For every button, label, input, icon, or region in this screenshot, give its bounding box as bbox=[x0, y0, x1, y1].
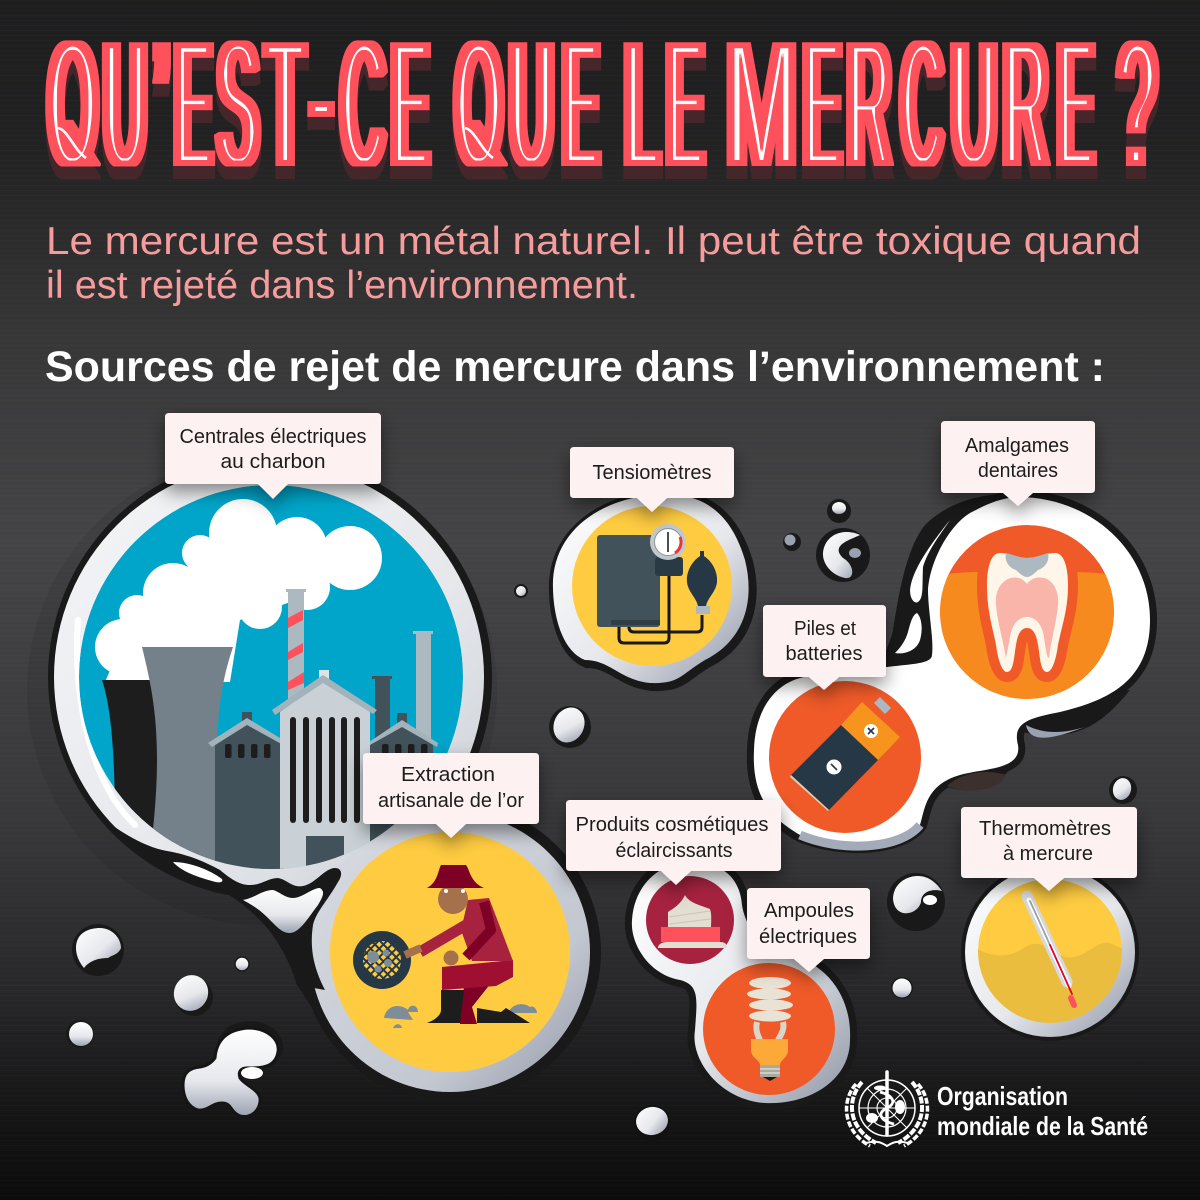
cuff bbox=[597, 535, 660, 627]
title: E bbox=[564, 5, 597, 203]
blob dark base bbox=[754, 494, 1150, 846]
label: thermometers: à mercure bbox=[1003, 843, 1093, 865]
title: L bbox=[626, 5, 658, 203]
intro text: Le mercure est un métal naturel. Il peut être toxique quand bbox=[46, 220, 1141, 263]
title: T bbox=[267, 5, 304, 203]
section heading: Sources de rejet de mercure dans l’environnement : bbox=[45, 343, 1105, 391]
title: E bbox=[668, 5, 702, 203]
title: M bbox=[727, 5, 796, 203]
label: coal power plants: Centrales électriques bbox=[180, 426, 366, 448]
title bbox=[45, 40, 1160, 180]
emblem bbox=[847, 1072, 927, 1146]
dark band between blobs bbox=[112, 825, 341, 990]
pale chimney bbox=[413, 631, 433, 744]
black cooling tower bbox=[102, 680, 174, 842]
white streak bbox=[173, 862, 222, 882]
grey cooling tower bbox=[142, 647, 233, 875]
label: artisanal gold mining: artisanale de l’or bbox=[378, 790, 524, 812]
light bulb bbox=[703, 963, 835, 1095]
title: S bbox=[218, 5, 257, 203]
title: E bbox=[176, 5, 210, 203]
title: C bbox=[342, 5, 384, 203]
miner bbox=[405, 865, 530, 1024]
intro text bbox=[46, 220, 1141, 307]
title: L bbox=[626, 5, 658, 203]
title: ’ bbox=[156, 5, 167, 203]
label: thermometers: Thermomètres bbox=[979, 818, 1111, 840]
title: C bbox=[902, 5, 941, 203]
label: batteries: batteries bbox=[786, 643, 862, 665]
blob highlights bbox=[895, 520, 950, 653]
title: T bbox=[267, 5, 304, 203]
label: skin lightening products: éclaircissants bbox=[616, 840, 732, 862]
title: R bbox=[848, 5, 890, 203]
title: E bbox=[176, 5, 210, 203]
label: dental amalgams bbox=[941, 421, 1095, 506]
title: Q bbox=[49, 5, 96, 203]
label: artisanal gold mining: Extraction bbox=[401, 764, 495, 786]
title: E bbox=[393, 5, 427, 203]
title: R bbox=[1004, 5, 1047, 203]
title: E bbox=[1059, 5, 1092, 203]
droplets bbox=[66, 499, 1137, 1141]
intro text: il est rejeté dans l’environnement. bbox=[46, 264, 638, 307]
label: dental amalgams: dentaires bbox=[978, 460, 1058, 482]
blob body bbox=[27, 455, 601, 1102]
smoke cloud bbox=[95, 499, 382, 682]
label: batteries: Piles et bbox=[794, 618, 856, 640]
gauge bbox=[650, 524, 686, 576]
label: skin lightening products bbox=[566, 800, 781, 885]
label: blood pressure monitors: Tensiomètres bbox=[592, 462, 712, 484]
organisation name: mondiale de la Santé bbox=[937, 1111, 1148, 1141]
panel: coal power plant and gold mining blob bbox=[27, 455, 601, 1102]
tubes bbox=[619, 576, 702, 643]
title: U bbox=[510, 5, 553, 203]
title: U bbox=[104, 5, 146, 203]
title: R bbox=[1004, 5, 1047, 203]
panel: sphygmomanometer blob bbox=[553, 494, 751, 685]
battery illustration bbox=[769, 681, 921, 833]
left building bbox=[208, 712, 285, 880]
thermometer bbox=[1027, 896, 1074, 1005]
title: - bbox=[312, 0, 330, 194]
label: coal power plants bbox=[165, 413, 381, 499]
title: E bbox=[1059, 5, 1092, 203]
title: U bbox=[510, 5, 553, 203]
organisation name bbox=[937, 1081, 1148, 1141]
label: coal power plants: au charbon bbox=[220, 451, 326, 473]
title: M bbox=[727, 5, 796, 203]
title: C bbox=[902, 5, 941, 203]
label: light bulbs: électriques bbox=[759, 926, 857, 948]
panel: thermometer blob bbox=[961, 863, 1139, 1041]
organisation name: Organisation bbox=[937, 1081, 1068, 1111]
title: Q bbox=[457, 5, 501, 203]
title: Q bbox=[457, 5, 501, 203]
title: E bbox=[805, 5, 839, 203]
cosmetics jar bbox=[646, 876, 734, 964]
label: artisanal gold mining bbox=[363, 753, 539, 838]
rocks bbox=[384, 1004, 537, 1028]
title: - bbox=[312, 0, 330, 194]
label: light bulbs bbox=[747, 888, 870, 972]
right building bbox=[370, 713, 438, 842]
bulb bbox=[687, 551, 717, 614]
silver drip bbox=[243, 888, 323, 933]
gold pan bbox=[353, 931, 411, 989]
panel: tooth and battery blob bbox=[754, 494, 1150, 846]
label: skin lightening products: Produits cosmétiques bbox=[576, 814, 768, 836]
logo: World Health Organization bbox=[847, 1072, 1148, 1146]
panel: cosmetics and bulb blob bbox=[632, 862, 850, 1103]
title: E bbox=[393, 5, 427, 203]
title: U bbox=[952, 5, 996, 203]
title: U bbox=[952, 5, 996, 203]
striped chimney bbox=[286, 589, 306, 710]
title: E bbox=[564, 5, 597, 203]
central building bbox=[272, 670, 377, 880]
title: Q bbox=[49, 5, 96, 203]
label: dental amalgams: Amalgames bbox=[965, 435, 1069, 457]
tooth illustration bbox=[935, 525, 1120, 705]
label: blood pressure monitors bbox=[570, 447, 734, 512]
title: S bbox=[218, 5, 257, 203]
title: C bbox=[342, 5, 384, 203]
title: R bbox=[848, 5, 890, 203]
title: U bbox=[104, 5, 146, 203]
label: light bulbs: Ampoules bbox=[764, 900, 854, 922]
label: batteries bbox=[763, 605, 886, 690]
dark chimney bbox=[372, 676, 392, 738]
title: E bbox=[805, 5, 839, 203]
coal scene illustration bbox=[79, 485, 463, 880]
gold miner illustration bbox=[330, 832, 570, 1072]
label: thermometers bbox=[961, 807, 1137, 891]
title: E bbox=[668, 5, 702, 203]
